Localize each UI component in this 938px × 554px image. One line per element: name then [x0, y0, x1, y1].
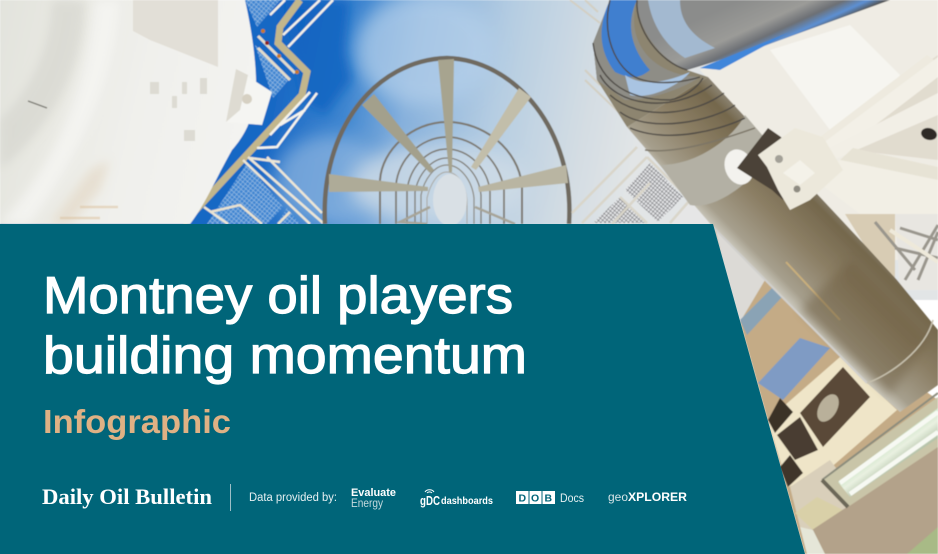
logo: gDC dashboards: gDC	[420, 493, 440, 508]
left stair structure	[183, 0, 333, 224]
subtitle: Infographic	[43, 403, 231, 440]
title line 2: building momentum	[43, 327, 527, 385]
title	[43, 267, 527, 385]
caged ladder	[325, 58, 569, 226]
logo: DOB Docs	[516, 491, 584, 505]
logo: geoXPLORER: XPLORER	[628, 492, 688, 504]
background lower right	[713, 224, 938, 554]
logo: gDC dashboards: dashboards	[441, 495, 493, 507]
data provided label: Data provided by:	[249, 492, 337, 504]
cream wall and beams at right	[700, 0, 938, 290]
logo: Daily Oil Bulletin: Daily Oil Bulletin	[42, 484, 212, 509]
logo: Evaluate Energy	[351, 487, 396, 510]
title line 1: Montney oil players	[43, 267, 513, 325]
insulated pipe	[627, 77, 938, 412]
fluorescent light	[822, 393, 938, 507]
logo: Evaluate Energy: Energy	[351, 498, 383, 510]
logo: DOB Docs: B	[544, 492, 552, 504]
logo: Evaluate Energy: Evaluate	[351, 487, 396, 499]
logo: geoXPLORER: geo	[608, 492, 628, 504]
logo: geoXPLORER	[608, 492, 688, 504]
teal title panel	[0, 224, 805, 554]
pipe bracket	[720, 128, 843, 210]
shiny elbow	[593, 0, 890, 151]
logo: DOB Docs: Docs	[560, 493, 584, 505]
logo: DOB Docs: D	[518, 492, 526, 504]
white tank	[0, 0, 272, 224]
footer divider	[230, 484, 231, 511]
right stair structure	[570, 0, 713, 224]
logo: gDC dashboards	[420, 490, 493, 508]
logo: DOB Docs: O	[531, 492, 539, 504]
sky	[0, 0, 938, 300]
